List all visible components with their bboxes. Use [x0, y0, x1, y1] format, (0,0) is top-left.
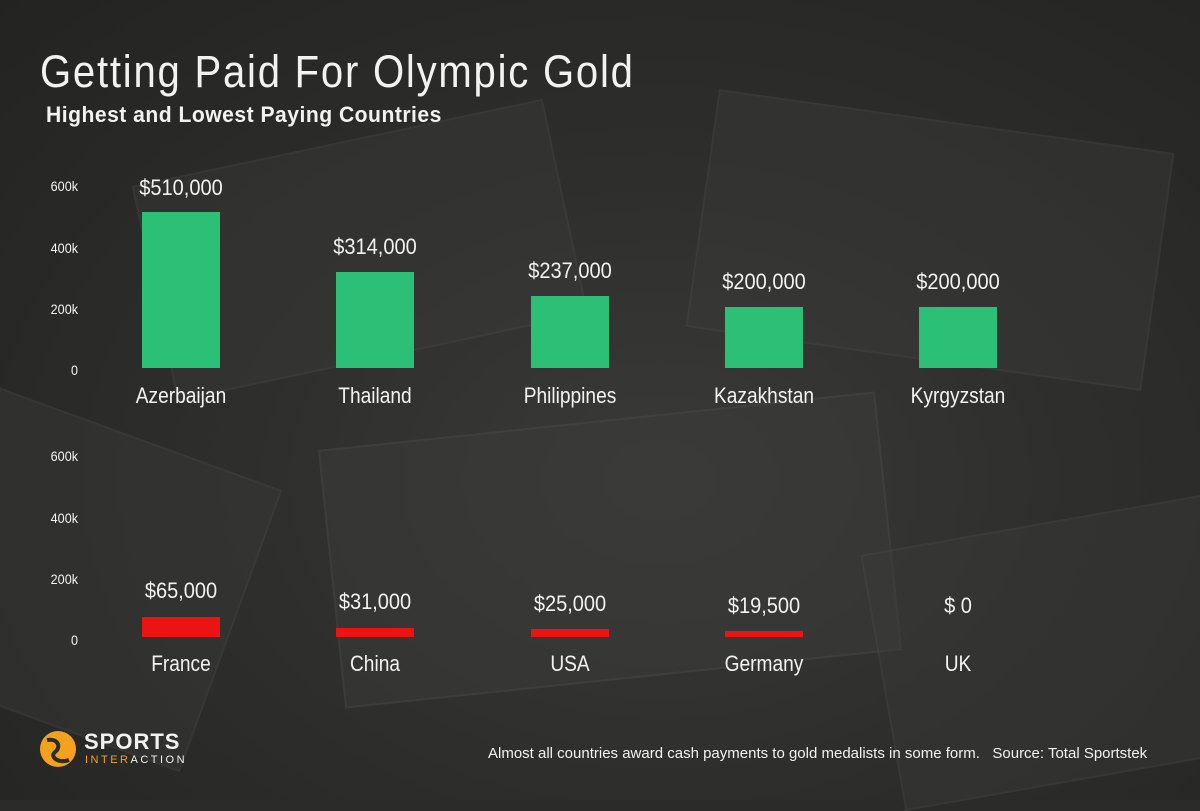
chart: highest paying: Kyrgyzstan	[911, 383, 1005, 408]
chart: lowest paying: 600k	[51, 448, 78, 464]
chart: lowest paying: 200k	[51, 571, 78, 587]
bar: China	[336, 589, 414, 676]
chart: lowest paying: China	[350, 651, 400, 676]
chart: highest paying: 200k	[51, 301, 78, 317]
chart: lowest paying: UK	[945, 651, 971, 676]
title: Getting Paid For Olympic Gold	[40, 46, 635, 97]
chart: lowest paying: $ 0	[944, 593, 972, 618]
chart: highest paying: $510,000	[139, 175, 223, 200]
bar: UK	[944, 593, 972, 676]
chart: highest paying	[50, 175, 1005, 408]
logo: SPORTS	[84, 729, 180, 754]
chart: highest paying: $314,000	[333, 234, 417, 259]
chart: lowest paying: Germany	[725, 651, 803, 676]
chart: lowest paying: 400k	[51, 510, 78, 526]
bar: Thailand	[333, 234, 417, 408]
logo: INTERACTION	[85, 754, 187, 766]
chart: highest paying: $200,000	[722, 269, 806, 294]
chart: lowest paying: $19,500	[728, 593, 800, 618]
chart: highest paying: 400k	[51, 240, 78, 256]
icon: logo ball	[40, 731, 76, 767]
bar: Kyrgyzstan	[911, 269, 1005, 408]
chart: highest paying: $237,000	[528, 258, 612, 283]
chart: lowest paying: $65,000	[145, 578, 217, 603]
chart: lowest paying: 0	[71, 632, 78, 648]
chart: highest paying: 0	[71, 362, 78, 378]
chart: lowest paying: USA	[550, 651, 590, 676]
bar: USA	[531, 591, 609, 676]
chart: lowest paying: $31,000	[339, 589, 411, 614]
chart: highest paying: Kazakhstan	[714, 383, 814, 408]
bar: Germany	[725, 593, 804, 676]
chart: highest paying: Thailand	[338, 383, 412, 408]
logo	[40, 729, 187, 767]
bar: Azerbaijan	[136, 175, 226, 408]
chart: lowest paying: France	[151, 651, 211, 676]
chart: lowest paying: $25,000	[534, 591, 606, 616]
chart: lowest paying	[50, 448, 972, 676]
bar: Kazakhstan	[714, 269, 814, 408]
chart: highest paying: Azerbaijan	[136, 383, 226, 408]
chart: highest paying: $200,000	[916, 269, 1000, 294]
bar: France	[142, 578, 220, 676]
subtitle: Highest and Lowest Paying Countries	[46, 102, 442, 127]
chart: highest paying: Philippines	[524, 383, 616, 408]
chart: highest paying: 600k	[51, 178, 78, 194]
footnote: Almost all countries award cash payments to gold medalists in some form. Source: Total Sportstek	[488, 745, 1147, 762]
bar: Philippines	[524, 258, 616, 408]
